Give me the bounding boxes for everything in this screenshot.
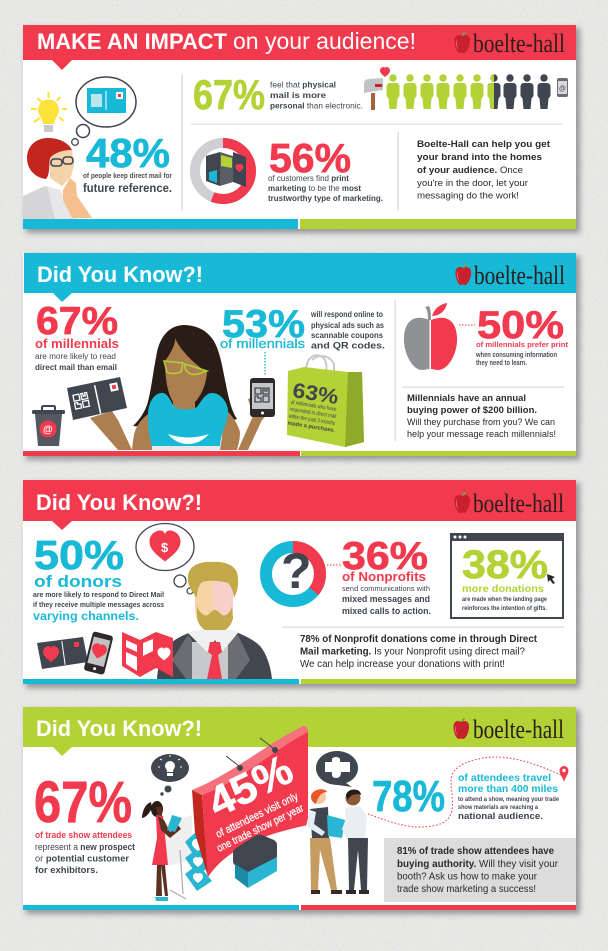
stat: 53% of millennials: will respond online to: [310, 310, 383, 319]
bottom bar: [23, 679, 576, 684]
stat text: attendees travel: [458, 773, 559, 821]
callout box: 81% of trade show attendees have: [397, 846, 554, 857]
call to action text: buying power of $200 billion.: [407, 405, 537, 416]
dotted route: [368, 757, 561, 827]
call to action text: 78% of Nonprofit donations come in through Direct: [300, 634, 538, 645]
icon: phone with heart: [83, 631, 114, 675]
header band: [24, 253, 576, 302]
stat: 67% of attendees: represent a new prospect: [35, 842, 135, 852]
icon: map pin: [560, 766, 568, 782]
browser window: 38%: more donations: [462, 583, 544, 595]
header band: [23, 707, 576, 756]
icon: light bulb: [31, 92, 67, 132]
browser window: 38%: reinforces the intention of gifts.: [462, 605, 547, 612]
stat: 50% prefer print: they need to learn.: [476, 360, 527, 367]
stat: 67% of attendees: [34, 770, 135, 875]
stat: 53% of millennials: of millennials: [220, 336, 306, 351]
stat: 67% of millennials: 67%: [36, 300, 118, 343]
booth text: one trade show per year: [215, 802, 306, 855]
call to action text: messaging do the work!: [417, 190, 519, 202]
call to action text: Mail marketing. Is your Nonprofit using direct mail?: [300, 646, 525, 658]
stat: 53% of millennials: scannable coupons: [311, 331, 384, 340]
call to action text: Boelte-Hall can help you get: [417, 139, 551, 150]
stat: 67%: feel that physical: [270, 80, 336, 90]
thought bubble: heart dollar: [136, 524, 194, 594]
panel: trade shows: [23, 707, 580, 914]
stat: 50% of donors: of donors: [34, 572, 122, 591]
shopping bag: 63%: 63%: [291, 379, 340, 409]
booth text: [200, 745, 306, 855]
stat: 53% of millennials: physical ads such as: [311, 321, 384, 330]
call to action text: [300, 634, 538, 670]
stat: 36% of nonprofits: [342, 535, 431, 616]
panel: nonprofits: [23, 480, 580, 688]
stat: 36% of nonprofits: send communications with: [342, 584, 430, 593]
dotted connector: [264, 352, 266, 376]
call to action text: Will they purchase from you? We can: [407, 417, 555, 428]
icon: phone: @: [559, 86, 566, 92]
stat: 67% of attendees: or potential customer: [35, 854, 130, 864]
stat: 48%: of people keep direct mail for: [83, 171, 172, 180]
stat: 56%: [268, 135, 383, 203]
stat: 56%: 56%: [269, 135, 351, 181]
call to action text: [417, 139, 551, 202]
stat text: attendees travel: show materials are reaching a: [458, 804, 538, 811]
stat: 67%: [193, 71, 363, 118]
stat: 50% of donors: are more likely to respond to Direct Mail: [33, 590, 164, 599]
icon: split apple: [404, 303, 457, 370]
thought bubble: postcard: [72, 77, 136, 145]
callout box: booth? Ask us how to make your: [397, 872, 538, 882]
stat: 56%: of customers find print: [268, 174, 349, 183]
stat: 36% of nonprofits: mixed calls to action.: [342, 606, 431, 616]
spotlights: [226, 738, 278, 770]
stat: 50% of donors: [33, 532, 164, 623]
stat: 67%: 67%: [193, 71, 265, 118]
bottom bar: [23, 219, 576, 229]
logo: boelte-hall: [473, 489, 564, 518]
stat: 53% of millennials: 53%: [222, 303, 305, 346]
illustration: woman with postcard and phone: [67, 325, 275, 450]
stat: 36% of nonprofits: mixed messages and: [342, 594, 430, 604]
call to action text: your brand into the homes: [417, 152, 542, 163]
stat: 67%: mail is more: [270, 90, 326, 100]
callout box: trade show marketing a success!: [397, 884, 536, 895]
logo: [453, 715, 564, 744]
logo: boelte-hall: [473, 29, 565, 58]
stat: 56%: trustworthy type of marketing.: [268, 194, 383, 203]
browser window: 38%: are made when the landing page: [462, 596, 547, 603]
stat: 48%: [83, 130, 172, 195]
shopping bag: 63%: [286, 355, 364, 447]
donut chart: 56%: [195, 143, 251, 199]
panel: millennials: [23, 253, 580, 460]
stat: 78%: 78%: [372, 772, 445, 821]
stat: 67% of attendees: 67%: [34, 770, 132, 835]
callout box: [384, 838, 576, 902]
stat: 53% of millennials: [220, 303, 385, 352]
icon: phone: [557, 78, 568, 97]
stat: 50% prefer print: [475, 304, 569, 367]
stat: 67% of millennials: [35, 300, 119, 372]
stat: 67% of attendees: of trade show attendees: [35, 830, 132, 841]
illustration: two men talking: [306, 789, 369, 894]
stat: 50% of donors: varying channels.: [33, 609, 139, 623]
stat: 48%: future reference.: [83, 181, 172, 195]
podium: [233, 835, 277, 888]
call to action text: of your audience. Once: [417, 165, 523, 176]
title: on your audience!: [233, 28, 416, 54]
logo: boelte-hall: [474, 261, 565, 290]
shopping bag: 63%: within the past 3 months: [287, 413, 336, 427]
browser window: 38%: 38%: [462, 543, 548, 587]
call to action text: you're in the door, let your: [417, 178, 528, 189]
call to action text: help your message reach millennials!: [407, 429, 556, 440]
stat: 50% prefer print: of millennials prefer print: [476, 340, 569, 349]
speech bubble: puzzle: [316, 751, 358, 787]
phone: [250, 378, 275, 417]
shopping bag: 63%: of millennials who have: [290, 400, 337, 413]
thought bubble: heart dollar: $: [161, 540, 169, 555]
stat text: attendees travel: to attend a show, meaning your trade: [458, 796, 559, 803]
title: MAKE AN IMPACT: [37, 29, 228, 54]
stat: 50% prefer print: 50%: [477, 304, 564, 347]
stat: 67%: personal than electronic.: [270, 100, 363, 110]
call to action text: [407, 393, 556, 440]
shopping bag: 63%: made a purchase.: [287, 421, 336, 434]
literature rack: [163, 815, 212, 899]
stat: 67% of attendees: for exhibitors.: [35, 865, 98, 875]
header band: [23, 480, 576, 530]
icon: postcard with heart: [37, 637, 88, 669]
browser window: 38%: [450, 533, 564, 618]
exhibition booth wall: 45%: [192, 726, 308, 877]
callout box: buying authority. Will they visit your: [397, 859, 559, 870]
question mark: ?: [281, 543, 312, 599]
panel: make an impact: [23, 25, 580, 233]
shopping bag: 63%: responded to direct mail: [289, 407, 337, 420]
heading: Did You Know?!: [36, 716, 202, 741]
stat: 67% of millennials: are more likely to read: [35, 352, 116, 361]
stat: 36% of nonprofits: of Nonprofits: [342, 569, 426, 584]
stat text: attendees travel: of attendees travel: [458, 773, 551, 784]
stat: 50% of donors: if they receive multiple messages across: [33, 600, 164, 609]
postcard: [67, 377, 127, 420]
illustration: thinking woman: [23, 138, 92, 219]
heading: Did You Know?!: [36, 490, 202, 515]
stat: 67% of millennials: direct mail than email: [35, 363, 117, 372]
stat: 50% of donors: 50%: [34, 532, 124, 578]
stat: 50% prefer print: when consuming information: [475, 352, 557, 359]
illustration: woman with tablet: [142, 801, 182, 901]
heading: Did You Know?!: [37, 262, 203, 287]
stat: 67% of millennials: of millennials: [35, 336, 119, 351]
stat: 56%: marketing to be the most: [268, 184, 361, 193]
icon: brochure: [206, 152, 246, 187]
thought bubble: idea: [151, 754, 189, 796]
stat text: attendees travel: more than 400 miles: [458, 784, 558, 795]
icon: trash with email: [32, 406, 65, 446]
bottom bar: [23, 451, 576, 456]
icon: mailbox: [364, 67, 390, 110]
header band: [23, 25, 576, 70]
icon: red brochure: [122, 632, 173, 677]
logo: boelte-hall: [473, 715, 564, 744]
stat: 36% of nonprofits: 36%: [342, 535, 428, 578]
booth text: of attendees visit only: [214, 790, 301, 841]
stat: 53% of millennials: and QR codes.: [311, 340, 385, 352]
people pictogram: 67 percent: [386, 74, 550, 109]
stat: 48%: 48%: [86, 130, 170, 176]
booth text: 45%: [200, 745, 300, 826]
call to action text: Millennials have an annual: [407, 393, 526, 404]
illustration: bearded man: [157, 562, 272, 679]
stat text: attendees travel: national audience.: [458, 811, 543, 821]
icon: trash with email: @: [43, 424, 53, 436]
bottom bar: [23, 905, 576, 910]
call to action text: We can help increase your donations with print!: [300, 659, 505, 670]
donut chart: 36%: [266, 547, 320, 601]
